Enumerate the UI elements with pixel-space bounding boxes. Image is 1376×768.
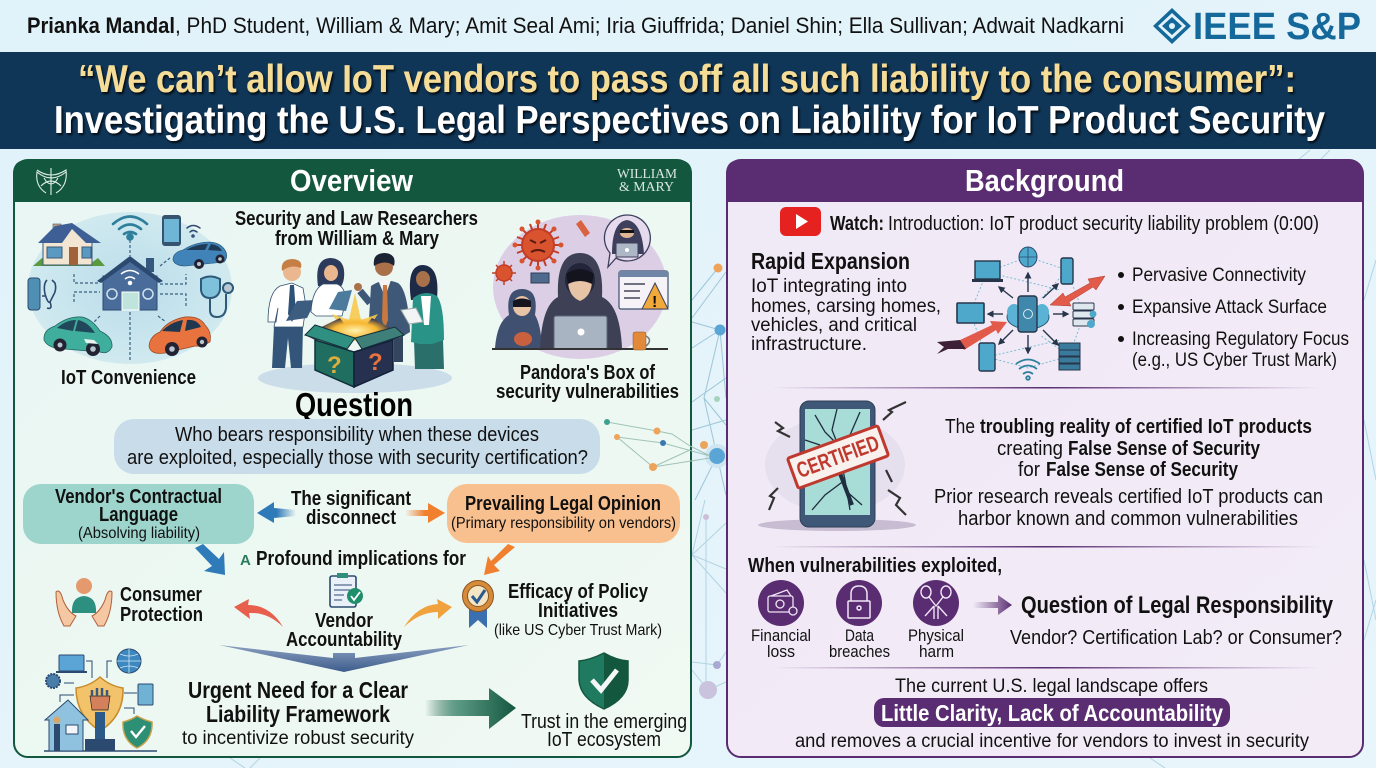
top right phone (1061, 258, 1073, 284)
label: trust in ecosystem: IoT ecosystem (547, 729, 661, 751)
glowing open box: ? (327, 352, 342, 379)
red arrow: attack (937, 321, 1007, 354)
text: rapid expansion: Rapid Expansion (751, 248, 910, 274)
harm: data breaches (829, 580, 890, 661)
video link (780, 207, 1319, 236)
video link: Introduction: IoT product security liability problem (0:00) (888, 213, 1319, 235)
overview header: & MARY (619, 179, 674, 194)
logo: IEEE S&P: IEEE S&P (1193, 6, 1361, 48)
highlight pill: Little Clarity, Lack of Accountability (881, 700, 1223, 726)
heading: profound implications: Profound implications for (256, 548, 466, 570)
keypad (531, 273, 549, 283)
arrow: orange right (405, 503, 445, 523)
text: rapid expansion: IoT integrating into (751, 276, 907, 297)
box: vendor's contractual language: Vendor's Contractual (55, 486, 222, 508)
text: rapid expansion: vehicles, and critical (751, 315, 917, 336)
box: vendor's contractual language: (Absolving liability) (78, 525, 200, 542)
question box (114, 419, 600, 474)
video link: Watch: (830, 213, 884, 235)
small house (33, 223, 105, 266)
heading: profound implications: A (240, 552, 251, 569)
small wifi (187, 226, 200, 237)
phone (162, 215, 181, 246)
harm: physical harm: harm (919, 643, 954, 661)
icon: shield (579, 653, 628, 709)
small hacker (495, 289, 542, 348)
label: efficacy of policy initiatives: Efficacy of Policy (508, 581, 649, 603)
heading: urgent need: Liability Framework (206, 701, 391, 727)
label: trust in ecosystem: Trust in the emerging (521, 711, 687, 733)
harm: physical harm: Physical (908, 627, 964, 645)
heading: question of legal responsibility (1010, 592, 1342, 649)
box: prevailing legal opinion: Prevailing Legal Opinion (465, 493, 661, 515)
label: IoT convenience: IoT Convenience (61, 367, 196, 389)
label: consumer protection (120, 584, 203, 626)
coffee mug (633, 332, 650, 350)
text: rapid expansion: infrastructure. (751, 334, 867, 355)
network accents over overview panel (604, 419, 710, 471)
phone bottom left (979, 343, 995, 371)
person 2 (311, 258, 352, 316)
tablet (957, 303, 984, 323)
text: troubling reality: troubling reality of certified IoT products (980, 416, 1312, 438)
box: vendor's contractual language: Language (99, 504, 178, 526)
arrow: orange diagonal (484, 544, 515, 575)
label: pandora's box (496, 362, 679, 403)
background header (726, 160, 1363, 202)
laptop (492, 316, 668, 350)
arrow: blue left (257, 502, 296, 523)
label: pandora's box: Pandora's Box of (520, 362, 655, 384)
alert window (619, 271, 668, 311)
label: efficacy of policy initiatives (494, 581, 662, 639)
icon: badge (462, 580, 494, 628)
text: troubling reality: creating (997, 438, 1063, 460)
label: vendor accountability: Vendor (315, 610, 373, 632)
text: rapid expansion: homes, carsing homes, (751, 296, 941, 317)
server rack (1059, 343, 1080, 370)
heading: researchers (235, 208, 478, 250)
illustration: researchers and box (258, 253, 452, 393)
panel: overview (13, 160, 692, 757)
arrow: red curved (234, 599, 283, 627)
arrow: converging chevron (219, 645, 469, 672)
wifi icon (113, 216, 147, 240)
certified stamp: CERTIFIED (793, 430, 883, 483)
orange car (149, 317, 210, 356)
person 3 (354, 253, 410, 362)
glowing open box (305, 293, 404, 387)
label: significant disconnect (291, 488, 411, 529)
harm: financial loss: Financial (751, 627, 811, 645)
label: efficacy of policy initiatives: (like US Cyber Trust Mark) (494, 622, 662, 639)
person 4 (401, 265, 444, 369)
label: pandora's box: security vulnerabilities (496, 381, 679, 403)
harm: data breaches: breaches (829, 643, 890, 661)
illustration: hackers (492, 215, 668, 359)
heading: urgent need: Urgent Need for a Clear (188, 677, 408, 703)
heading: urgent need: to incentivize robust security (182, 728, 414, 749)
harm: physical harm (908, 580, 964, 661)
main hacker (540, 253, 622, 348)
conclusion: and removes a crucial incentive for vendors to invest in security (795, 731, 1309, 752)
blue car (173, 242, 227, 269)
label: efficacy of policy initiatives: Initiatives (538, 600, 618, 622)
heading: question: Question (295, 386, 413, 423)
label: vendor accountability: Accountability (286, 629, 403, 651)
stethoscope, right (201, 276, 233, 317)
text: rapid expansion (751, 248, 941, 355)
person 1 (268, 259, 316, 368)
bullet list: (e.g., US Cyber Trust Mark) (1132, 350, 1337, 371)
box: prevailing legal opinion: (Primary responsibility on vendors) (451, 515, 676, 532)
green car (44, 317, 112, 356)
heading: when vulnerabilities exploited: When vulnerabilities exploited, (748, 555, 1002, 577)
box: prevailing legal opinion (447, 484, 680, 543)
label: significant disconnect: disconnect (306, 507, 396, 529)
top globe pin (1019, 247, 1037, 267)
illustration: IoT convenience (28, 212, 233, 364)
label: consumer protection: Consumer (120, 584, 202, 606)
authors line: , PhD Student, William & Mary; Amit Seal Ami; Iria Giuffrida; Daniel Shin; Ella Sullivan; Adwait Nadkarni (175, 13, 1124, 38)
text: troubling reality (934, 416, 1323, 530)
text: troubling reality: False Sense of Security (1046, 459, 1239, 481)
text: troubling reality: The (945, 416, 975, 438)
question box: Who bears responsibility when these devices (175, 424, 539, 446)
label: vendor accountability (286, 610, 403, 651)
virus large (512, 220, 564, 270)
heading: researchers: from William & Mary (275, 228, 440, 250)
arrow: green gradient (425, 688, 516, 729)
bullet list: Pervasive Connectivity (1132, 265, 1306, 286)
red arrow: double headed (1050, 276, 1105, 306)
harm: financial loss: loss (767, 643, 795, 661)
alert window: ! (652, 294, 657, 311)
arrow: orange curved (404, 599, 452, 627)
heading: researchers: Security and Law Researchers (235, 208, 478, 230)
overview header: Overview (290, 163, 414, 198)
central smart home (97, 256, 163, 310)
certified stamp (787, 426, 889, 488)
overview header (13, 160, 692, 202)
decorative network background (230, 150, 1376, 768)
server right (1073, 303, 1096, 328)
glowing open box: ? (368, 349, 383, 376)
label: trust in ecosystem (521, 711, 687, 751)
illustration: cracked certified phone (758, 401, 916, 531)
arrow: blue diagonal (195, 544, 225, 575)
text: troubling reality: False Sense of Security (1068, 438, 1261, 460)
overview header: WILLIAM (617, 166, 677, 181)
wearable and stethoscope, left (28, 278, 56, 310)
bullet list (1118, 265, 1349, 371)
label: consumer protection: Protection (120, 604, 203, 626)
text: troubling reality: Prior research reveals certified IoT products can (934, 486, 1323, 508)
orange usb (576, 220, 590, 237)
laptop (972, 261, 1003, 282)
icon: youtube play (780, 207, 821, 236)
background header: Background (965, 163, 1124, 198)
speech bubble hacker (604, 215, 650, 267)
wifi (1016, 360, 1040, 380)
harm: data breaches: Data (845, 627, 875, 645)
question box: are exploited, especially those with security certification? (127, 447, 588, 469)
bullet list: Expansive Attack Surface (1132, 297, 1327, 318)
label: significant disconnect: The significant (291, 488, 411, 510)
heading: urgent need (182, 677, 414, 749)
icon: clipboard (330, 573, 363, 607)
text: troubling reality: for (1018, 459, 1040, 481)
box: vendor's contractual language (23, 484, 254, 544)
central cloud phone (1007, 296, 1049, 332)
icon: liability framework scene (44, 649, 157, 751)
title banner (0, 52, 1376, 149)
illustration: connected devices network (937, 247, 1105, 380)
panel: background (726, 160, 1363, 757)
text: troubling reality: harbor known and common vulnerabilities (958, 508, 1298, 530)
conclusion: The current U.S. legal landscape offers (895, 676, 1208, 697)
virus small (492, 261, 516, 285)
arrow: purple (973, 595, 1012, 615)
authors line: Prianka Mandal (27, 13, 175, 38)
icon: hands protecting person (56, 578, 112, 626)
bullet list: Increasing Regulatory Focus (1132, 329, 1349, 350)
harm: financial loss (751, 580, 811, 661)
conclusion (795, 676, 1309, 752)
heading: question of legal responsibility: Vendor? Certification Lab? or Consumer? (1010, 627, 1342, 649)
